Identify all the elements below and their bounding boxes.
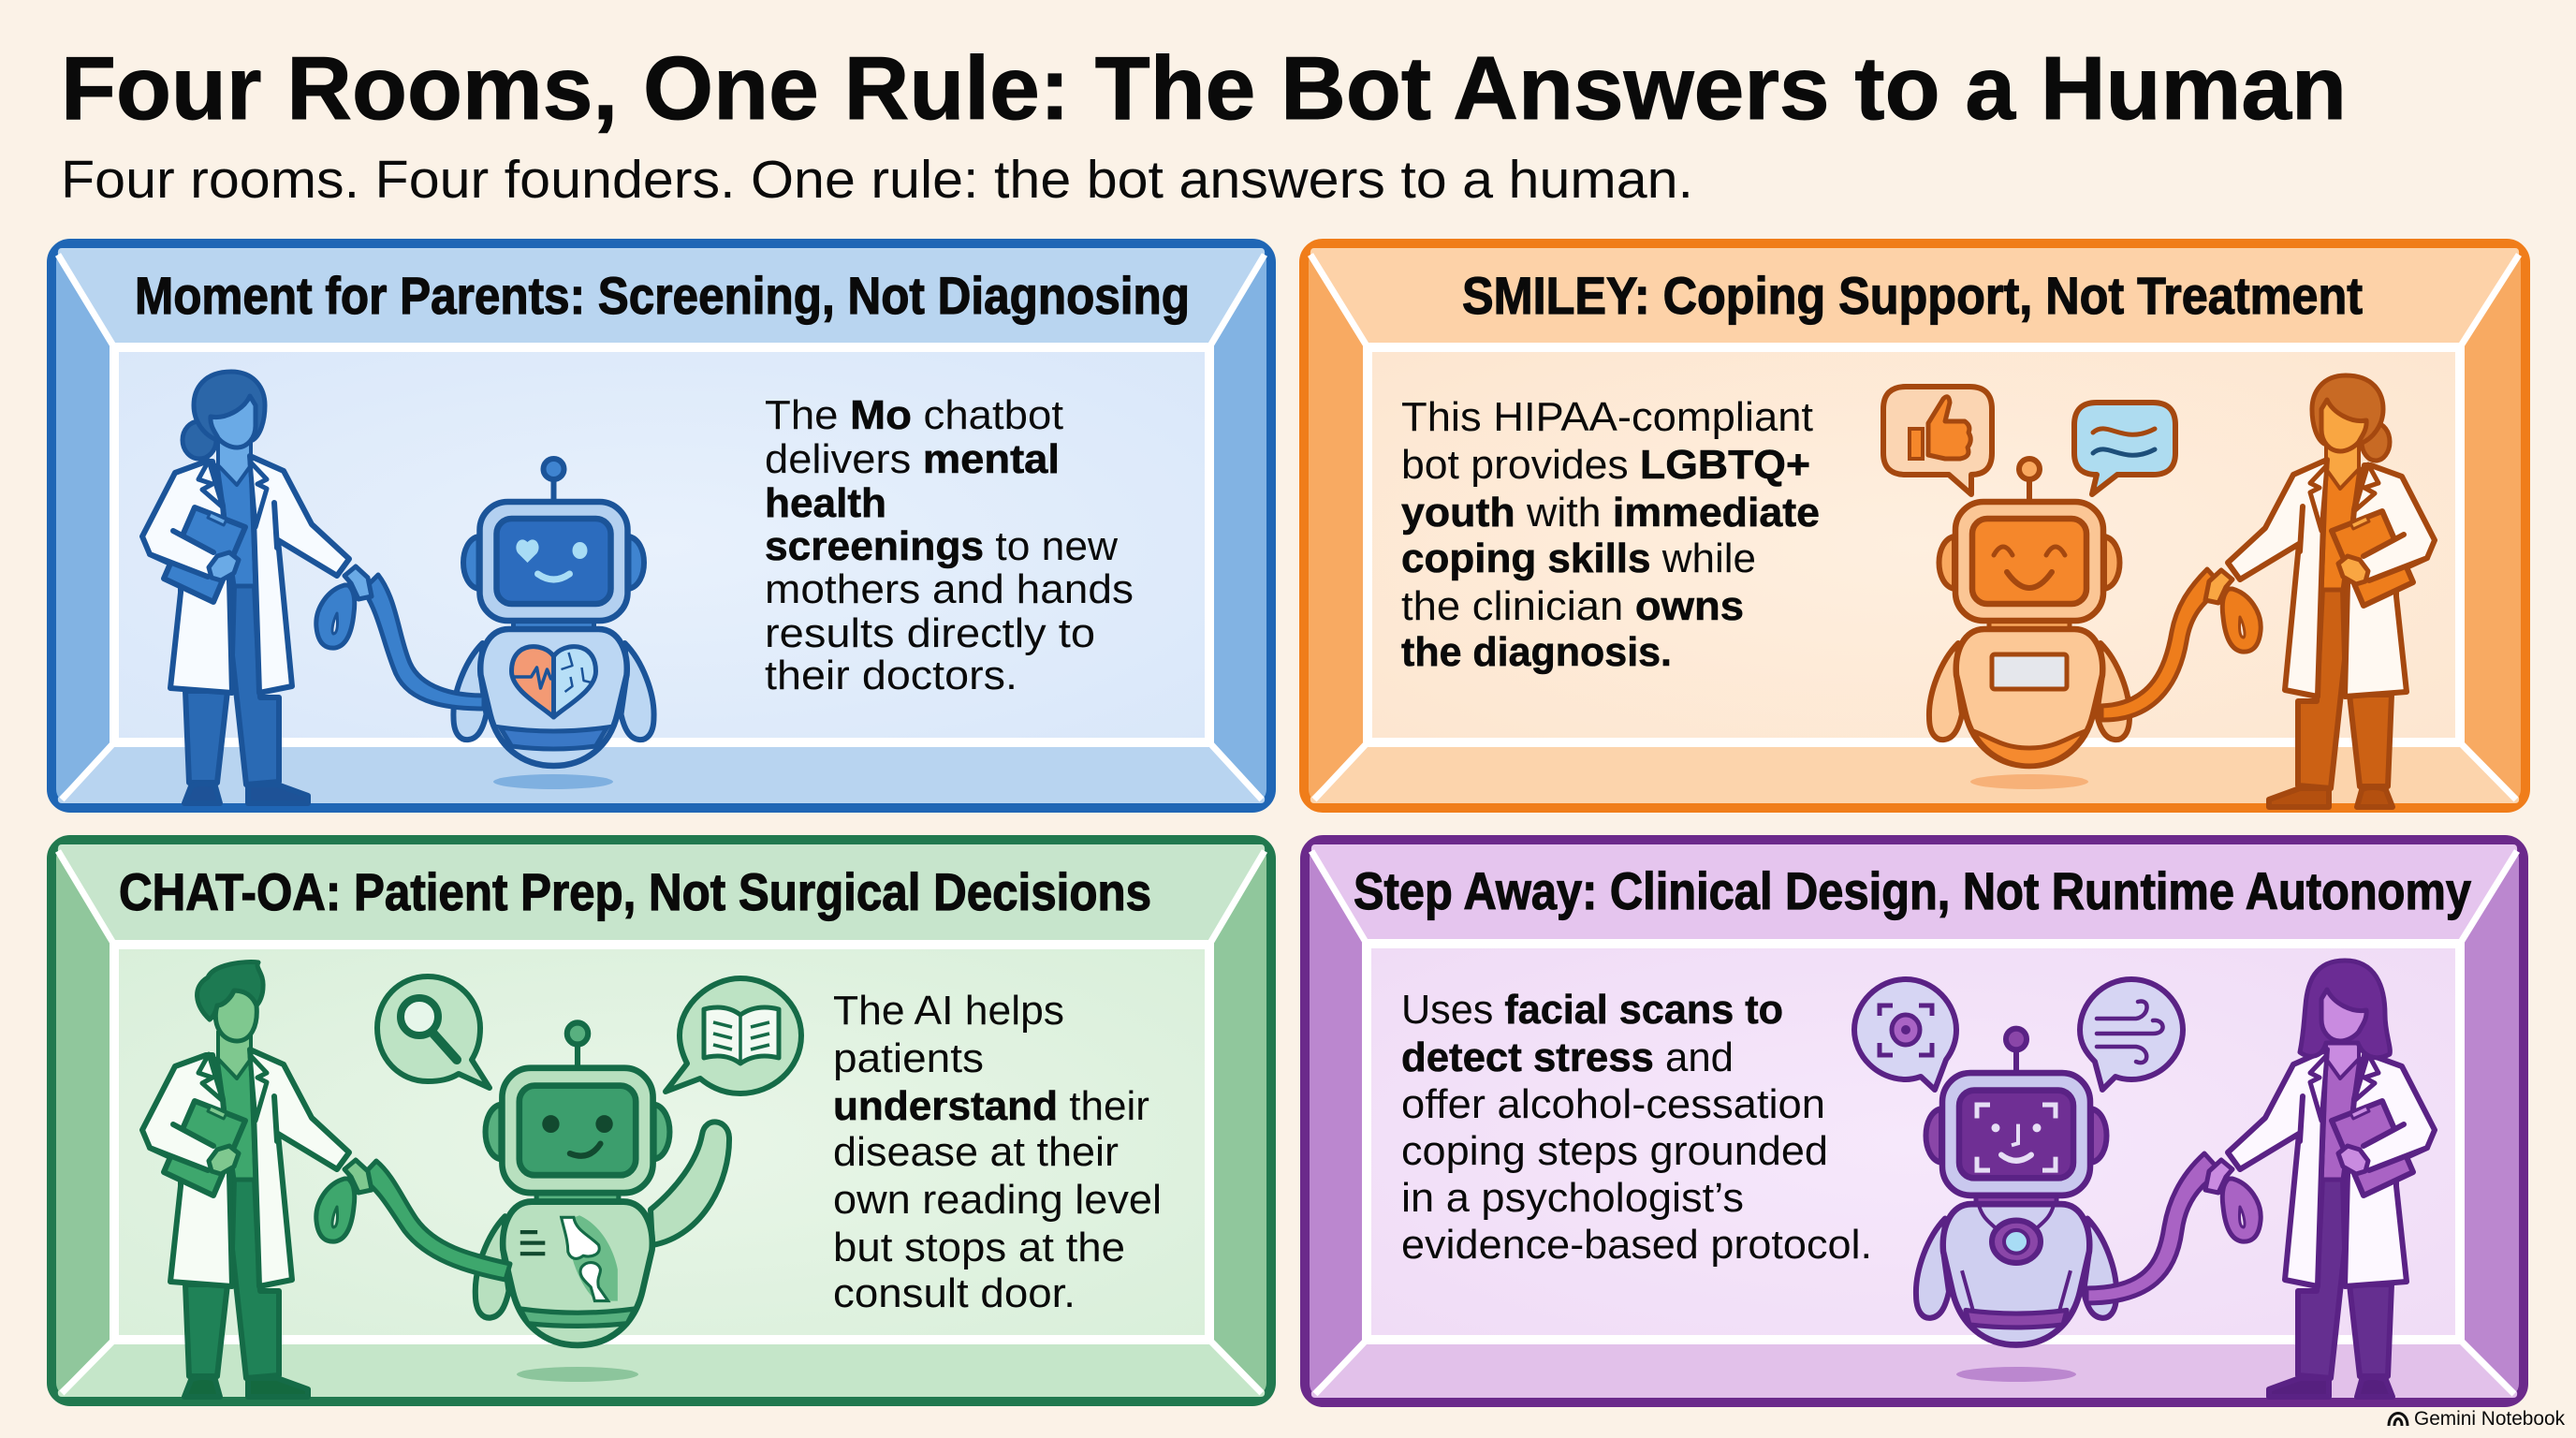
body text: screenings to new (765, 523, 1118, 569)
robot shadow (1956, 1367, 2076, 1382)
icon: Gemini mark (2389, 1414, 2408, 1426)
body text (765, 392, 1134, 698)
icon: open book speech bubble (666, 978, 801, 1093)
panel: CHAT-OA (51, 840, 1271, 1401)
doctor (2205, 375, 2435, 807)
body text: results directly to (765, 610, 1095, 656)
body text: consult door. (833, 1270, 1076, 1316)
leash (360, 1161, 510, 1280)
footer label: Gemini Notebook (2414, 1408, 2565, 1430)
room frame (1304, 243, 2525, 808)
heading: Moment for Parents: Screening, Not Diagnosing (135, 266, 1190, 325)
body text: Uses facial scans to (1401, 987, 1783, 1033)
robot raised arm (651, 1122, 729, 1245)
subtitle: Four rooms. Four founders. One rule: the bot answers to a human. (61, 150, 1693, 210)
body text: youth with immediate (1401, 490, 1820, 536)
body text: delivers mental (765, 436, 1060, 482)
panel: Moment for Parents (51, 243, 1271, 808)
heading: SMILEY: Coping Support, Not Treatment (1462, 266, 2363, 325)
room frame (1305, 840, 2524, 1402)
icon: knee joint (562, 1217, 608, 1301)
panel: Step Away (1305, 840, 2524, 1402)
robot (1916, 1029, 2116, 1345)
body text: health (765, 480, 886, 526)
robot shadow (1970, 774, 2088, 789)
icon: thumbs-up speech bubble (1883, 387, 1992, 494)
leash (363, 575, 484, 709)
heading: CHAT-OA: Patient Prep, Not Surgical Decisions (119, 862, 1151, 921)
body text: detect stress and (1401, 1034, 1734, 1080)
body text: offer alcohol-cessation (1401, 1081, 1825, 1127)
body text: mothers and hands (765, 566, 1134, 612)
robot shadow (517, 1367, 638, 1382)
body text: the clinician owns (1401, 583, 1744, 629)
body text: their doctors. (765, 653, 1017, 698)
body text: patients (833, 1035, 984, 1081)
body text: coping steps grounded (1401, 1128, 1828, 1174)
robot (476, 1022, 669, 1345)
robot (453, 459, 654, 766)
body text: in a psychologist’s (1401, 1175, 1744, 1221)
doctor (2205, 961, 2435, 1397)
title: Four Rooms, One Rule: The Bot Answers to a Human (61, 38, 2347, 139)
body text: The AI helps (833, 988, 1064, 1034)
icon: breath speech bubble (2080, 979, 2183, 1090)
panel: SMILEY (1304, 243, 2525, 808)
leash (2086, 1153, 2221, 1303)
leash (2101, 569, 2224, 720)
body text: The Mo chatbot (765, 392, 1063, 438)
icon: face scan speech bubble (1854, 979, 1956, 1090)
body text: the diagnosis. (1401, 629, 1672, 675)
body text: evidence-based protocol. (1401, 1222, 1872, 1268)
body text: but stops at the (833, 1225, 1125, 1270)
icon: calm waves speech bubble (2074, 403, 2175, 494)
body text: bot provides LGBTQ+ (1401, 442, 1810, 488)
heart icon (511, 647, 595, 717)
body text: disease at their (833, 1129, 1119, 1175)
body text: understand their (833, 1083, 1149, 1129)
body text: own reading level (833, 1177, 1162, 1223)
body text (1401, 987, 1872, 1268)
doctor (142, 372, 372, 803)
room frame (51, 243, 1271, 808)
body text: coping skills while (1401, 536, 1756, 581)
body text (1401, 394, 1820, 675)
body text (833, 988, 1162, 1316)
doctor (142, 962, 372, 1397)
robot (1929, 459, 2130, 766)
body text: This HIPAA-compliant (1401, 394, 1813, 440)
room frame (51, 840, 1271, 1401)
robot shadow (493, 774, 613, 789)
icon: magnifier speech bubble (377, 976, 490, 1088)
